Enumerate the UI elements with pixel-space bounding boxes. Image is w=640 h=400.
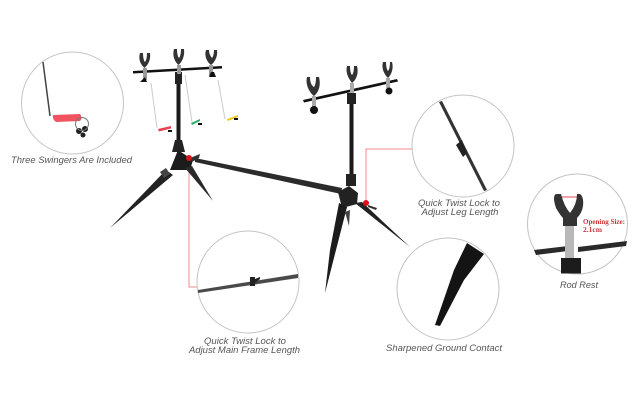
label: ground contact: Sharpened Ground Contact xyxy=(386,343,503,353)
rests xyxy=(307,77,320,96)
product: rod pod xyxy=(110,49,410,293)
panel: main frame lock xyxy=(188,231,300,355)
label: leg lock: Quick Twist Lock to xyxy=(418,198,500,208)
icon: red swinger xyxy=(53,114,82,122)
callout line: leg lock xyxy=(366,149,412,203)
label: frame lock: Adjust Main Frame Length xyxy=(188,345,300,355)
label: frame lock: Quick Twist Lock to xyxy=(204,336,286,346)
label: swingers: Three Swingers Are Included xyxy=(11,155,133,165)
icon: twist lock xyxy=(250,277,260,286)
panel: rod rest xyxy=(528,174,628,290)
label: opening size: 2.1cm xyxy=(583,226,602,234)
icon: spike xyxy=(435,243,484,326)
icon: rail xyxy=(534,241,627,255)
label: leg lock xyxy=(418,198,500,217)
icon: swinger arm xyxy=(43,62,50,116)
callout line: main frame xyxy=(189,160,198,287)
icon: frame tube xyxy=(198,274,298,293)
icon: twist lock xyxy=(456,140,467,157)
rests xyxy=(139,53,150,68)
main frame bar xyxy=(195,158,342,194)
arrow: opening xyxy=(562,196,577,198)
label: leg lock: Adjust Leg Length xyxy=(420,207,498,217)
swingers xyxy=(151,75,225,128)
label: rod rest: Rod Rest xyxy=(560,280,598,290)
red markers xyxy=(186,155,369,206)
label: opening size: Opening Size: xyxy=(583,218,625,226)
left tripod xyxy=(110,49,238,228)
icon: leg tube xyxy=(439,101,487,191)
icon: weights xyxy=(76,118,88,138)
panel: swingers xyxy=(11,52,133,165)
icon: stem xyxy=(565,226,574,259)
right tripod xyxy=(303,62,410,293)
panel: ground contact xyxy=(386,238,503,353)
label: frame lock xyxy=(188,336,300,355)
panel: leg lock xyxy=(412,95,514,217)
label: opening size xyxy=(583,218,625,234)
icon: post xyxy=(561,258,581,274)
icon: fork xyxy=(554,194,583,226)
